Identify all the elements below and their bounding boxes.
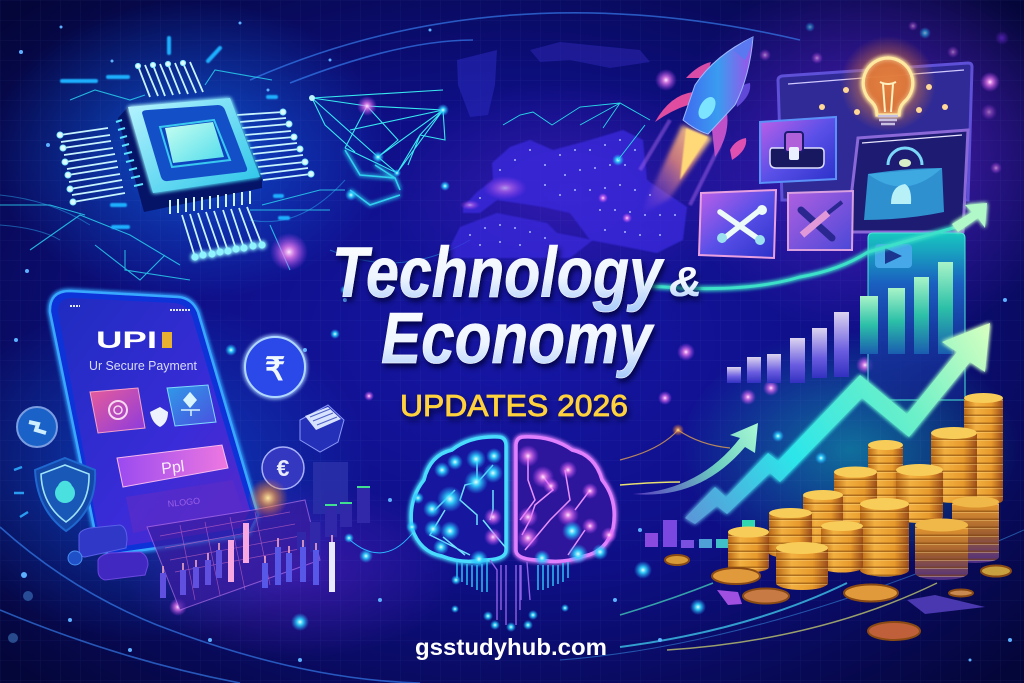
stack — [821, 521, 863, 572]
stack — [952, 496, 999, 563]
stack — [769, 508, 812, 558]
map: arctic landmass — [530, 42, 650, 68]
title line 2: Economy — [381, 299, 655, 379]
stack — [931, 427, 977, 503]
shield icon — [35, 458, 95, 531]
round button icon — [17, 407, 57, 447]
big growth arrow — [685, 323, 990, 524]
euro coin icon: € — [277, 455, 290, 481]
chart panel — [147, 500, 320, 610]
blue tile — [167, 385, 216, 426]
small bar chart — [645, 520, 755, 548]
brain nodes cyan — [406, 448, 503, 568]
subtitle: UPDATES 2026 — [400, 388, 628, 423]
loose card — [907, 595, 985, 614]
right hemisphere — [516, 437, 614, 561]
rupee coin icon — [245, 337, 305, 397]
chart grid — [160, 512, 305, 600]
stack — [776, 542, 828, 590]
stack — [860, 498, 909, 577]
stack — [964, 393, 1003, 505]
map: eurasia — [463, 130, 687, 253]
title line 1: Technology — [332, 234, 665, 313]
panel: video chart — [640, 203, 987, 400]
cube icon — [300, 405, 344, 452]
map: africa — [450, 213, 593, 258]
rocket fins — [655, 92, 693, 122]
status bar — [70, 306, 190, 310]
coin stacks — [665, 393, 1011, 640]
chip short pins — [170, 191, 250, 214]
phone: UPI — [50, 291, 258, 555]
euro coin icon — [262, 447, 304, 489]
world map — [440, 42, 687, 258]
map: north connections — [503, 103, 650, 160]
network mesh — [309, 90, 449, 205]
icon tile: bag — [760, 117, 836, 183]
candlestick chart — [147, 462, 415, 610]
rear bars — [297, 487, 370, 552]
purple bars — [727, 367, 741, 383]
UPI logo text: UPI — [96, 327, 157, 354]
shield side dashes — [14, 467, 28, 517]
pink tile — [90, 388, 145, 433]
blue dashes near chip — [62, 38, 288, 227]
trend arrow head — [952, 203, 987, 232]
loose coins — [665, 555, 1011, 640]
trend curve — [640, 226, 960, 289]
map: city dots — [469, 139, 676, 246]
map: pink city glow — [483, 176, 527, 200]
title underline — [330, 376, 670, 378]
icon tile: tools — [699, 190, 776, 258]
brain — [406, 437, 617, 632]
brain nodes cyan right — [534, 521, 608, 566]
stack — [803, 490, 843, 545]
brain stem traces — [490, 560, 530, 625]
doc panel — [313, 462, 348, 514]
brain traces — [430, 460, 506, 555]
title — [332, 234, 702, 379]
purple chip — [717, 590, 742, 605]
pay button — [117, 445, 228, 487]
chip package — [118, 98, 262, 212]
brain stem combs — [457, 562, 568, 592]
rocket body — [683, 37, 753, 134]
stack — [868, 440, 903, 500]
website: gsstudyhub.com — [415, 634, 607, 660]
secure payment text: Ur Secure Payment — [89, 358, 197, 373]
stack — [915, 518, 968, 580]
bulb glass — [863, 58, 913, 115]
pay button: Ppl — [160, 458, 185, 478]
panel: lock case — [847, 130, 968, 232]
left hemisphere — [411, 437, 506, 561]
ampersand: & — [669, 258, 702, 305]
lower card — [126, 480, 243, 533]
phone stand blocks — [68, 525, 148, 580]
stack — [834, 466, 877, 523]
glowing point — [270, 233, 308, 271]
rocket flame — [640, 125, 712, 215]
rupee coin icon: ₹ — [265, 351, 285, 387]
circuit traces — [0, 70, 345, 280]
stack — [896, 464, 943, 523]
briefcase — [864, 168, 944, 220]
shield mini — [150, 407, 168, 427]
icon: rocket — [640, 37, 753, 215]
chip pins — [60, 62, 311, 257]
stack — [728, 526, 769, 572]
icon: microchip — [57, 60, 314, 261]
chip pads — [57, 60, 314, 205]
light sparks — [819, 84, 948, 115]
candles — [163, 523, 332, 598]
brain nodes pink — [484, 445, 617, 549]
small growth arrow — [620, 423, 827, 495]
play button — [875, 244, 912, 268]
UPI accent — [162, 332, 172, 348]
rocket window — [695, 94, 719, 122]
map: north landmass — [457, 50, 497, 117]
icon tile: screwdriver — [788, 191, 853, 250]
lower card: NLOGO — [167, 496, 201, 509]
tall bars — [860, 296, 878, 354]
panel: light bulb — [778, 36, 972, 200]
